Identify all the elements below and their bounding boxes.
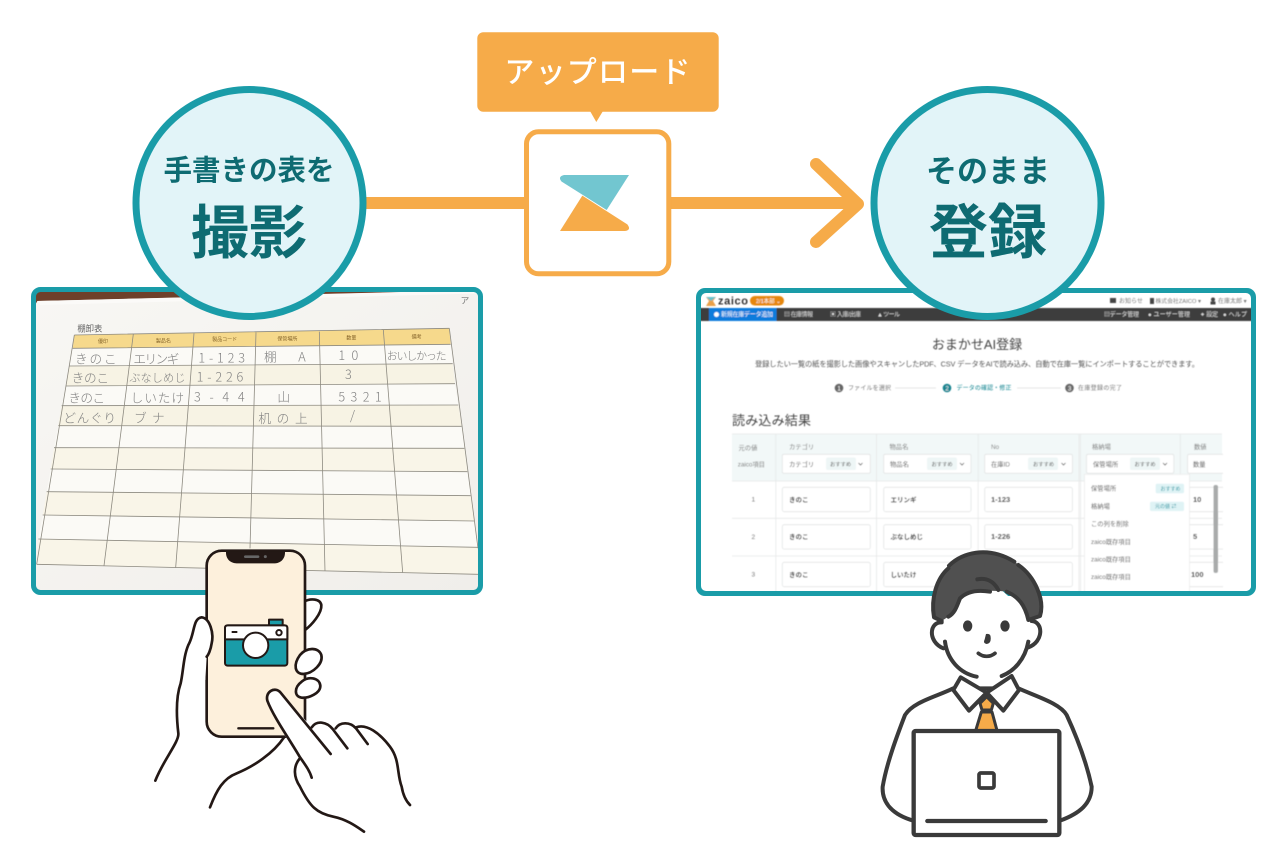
data rows: 100 xyxy=(1191,570,1204,579)
scrollbar xyxy=(1214,485,1218,573)
column mapping selects: おすすめ xyxy=(1134,461,1156,468)
data rows: 1-123 xyxy=(991,495,1010,504)
callout: upload: アップロード xyxy=(504,48,692,92)
page description: 登録したい一覧の紙を撮影した画像やスキャンしたPDF、CSV データをAIで読み込み、自動で在庫一覧にインポートすることができます。 xyxy=(755,360,1199,368)
dropdown menu xyxy=(1084,474,1190,599)
face xyxy=(931,577,1041,677)
step indicator: ファイルを選択 xyxy=(848,384,891,392)
handwritten entries: きのこ xyxy=(75,348,117,367)
column mapping selects: おすすめ xyxy=(1033,461,1054,468)
illustration: person working on a laptop xyxy=(883,552,1092,835)
icon: camera xyxy=(225,620,287,666)
dropdown menu: zaico既存項目 xyxy=(1091,572,1131,581)
data rows: きのこ xyxy=(789,496,808,504)
left circle keyword: 撮影 xyxy=(191,186,307,270)
data rows: きのこ xyxy=(789,571,808,579)
data rows xyxy=(751,454,1251,591)
handwritten entries: 棚 A xyxy=(264,347,306,366)
top-right account links: 株式会社ZAICO ▾ xyxy=(1156,297,1201,305)
data rows: エリンギ xyxy=(890,496,917,504)
data rows: しいたけ xyxy=(890,571,916,579)
column mapping selects xyxy=(782,454,1228,473)
dropdown menu: おすすめ xyxy=(1160,485,1181,492)
top-right account links: 在庫太郎 ▾ xyxy=(1218,297,1247,305)
table header band xyxy=(73,328,451,348)
callout: upload xyxy=(477,32,719,122)
header labels: 物品名 xyxy=(890,442,908,451)
top-right account links: お知らせ xyxy=(1119,297,1143,305)
handwritten entries: しいたけ xyxy=(131,387,184,406)
top-right account links xyxy=(1110,297,1247,305)
navigation bar: ● ヘルプ xyxy=(1223,312,1247,319)
smartphone xyxy=(207,551,305,737)
hair xyxy=(932,552,1041,621)
left hand thumb and palm xyxy=(155,617,212,781)
column mapping selects: 物品名 xyxy=(890,459,909,468)
data rows: 1 xyxy=(751,496,755,504)
handwritten entries: / xyxy=(350,405,355,424)
data rows: 5 xyxy=(1193,532,1197,541)
right circle keyword: 登録 xyxy=(929,185,1047,270)
zaico logo: zaico xyxy=(718,296,749,308)
navigation bar: ● ユーザー管理 xyxy=(1148,311,1190,319)
shirt collar xyxy=(953,676,1019,711)
handwritten entries: ぶなしめじ xyxy=(129,370,185,386)
right circle caption: そのまま xyxy=(926,146,1050,191)
handwritten entries: 3-44 xyxy=(194,387,245,406)
panel: handwritten table photo: 棚卸表 xyxy=(77,323,103,333)
handwritten entries: ア xyxy=(461,296,470,306)
handwritten entries: エリンギ xyxy=(133,348,179,367)
navigation bar: 新規在庫データ追加 xyxy=(721,311,773,319)
column mapping selects: カテゴリ xyxy=(789,459,814,468)
data rows: 2 xyxy=(751,534,755,541)
data rows: 1-226 xyxy=(991,532,1010,541)
column mapping selects: 在庫ID xyxy=(991,459,1010,468)
step indicator: 2 xyxy=(945,385,949,392)
front fingers xyxy=(296,649,322,698)
dropdown menu: 格納場 xyxy=(1091,502,1111,510)
column mapping selects: おすすめ xyxy=(830,461,851,468)
handwritten entries: きのこ xyxy=(68,387,105,406)
handwritten entries: おいしかった xyxy=(387,348,447,364)
panel: handwritten table photo: 備考 xyxy=(412,333,422,340)
data rows: 3 xyxy=(751,572,755,578)
results table xyxy=(732,434,1254,599)
header labels: 元の値 xyxy=(738,443,758,452)
section heading: 読み込み結果 xyxy=(732,413,811,428)
handwritten entries: 1-123 xyxy=(198,348,245,367)
header labels: 数値 xyxy=(1194,442,1207,451)
handwritten entries: 机の上 xyxy=(258,408,308,427)
panel: handwritten table photo: 優印 xyxy=(98,338,108,345)
handwritten entries: 5321 xyxy=(338,387,382,406)
data rows: きのこ xyxy=(789,533,808,541)
eyes, nose and mouth xyxy=(963,620,1010,656)
navigation bar: ✦ 設定 xyxy=(1200,311,1218,319)
navigation bar: ▲ ツール xyxy=(877,313,900,319)
wrist line xyxy=(210,737,284,807)
handwritten entries: 山 xyxy=(277,387,290,406)
dropdown menu: この列を削除 xyxy=(1091,519,1129,528)
necktie xyxy=(975,697,997,732)
body xyxy=(883,688,1092,821)
panel: handwritten table photo: 製品コード xyxy=(212,336,237,343)
header labels: No xyxy=(991,444,1000,451)
navigation bar xyxy=(698,308,1254,321)
connector line: left circle to logo box xyxy=(360,197,530,209)
step indicator: 1 xyxy=(837,385,841,392)
dropdown menu: 保管場所 xyxy=(1091,484,1117,492)
right hand xyxy=(267,689,410,832)
step indicator: 3 xyxy=(1068,385,1072,392)
dropdown menu: 元の値 ⇄ xyxy=(1155,503,1176,510)
page title: おまかせAI登録 xyxy=(932,337,1022,352)
back finger xyxy=(304,599,321,630)
navigation bar: ▤データ管理 xyxy=(1104,311,1139,319)
header labels: zaico項目 xyxy=(738,460,765,468)
navigation bar: ▤ 在庫情報 xyxy=(784,311,813,319)
column mapping selects: 数量 xyxy=(1193,459,1206,468)
step indicator: データの確認・修正 xyxy=(956,384,1012,392)
panel: handwritten table photo: 数量 xyxy=(346,334,356,341)
branch pill: 2/1本部 ⌄ xyxy=(756,297,781,305)
handwritten entries: きのこ xyxy=(72,367,109,386)
handwritten entries xyxy=(63,296,470,427)
column mapping selects: 保管場所 xyxy=(1093,459,1119,468)
handwritten entries: 10 xyxy=(338,345,359,364)
data rows: 10 xyxy=(1193,495,1201,504)
handwritten entries: どんぐり xyxy=(63,407,116,426)
zaico logo box xyxy=(526,132,669,274)
panel: handwritten table photo xyxy=(30,285,490,600)
handwritten entries: 1-226 xyxy=(197,367,244,386)
handwritten entries: ブナ xyxy=(134,407,165,426)
data rows: ぶなしめじ xyxy=(890,532,923,541)
arrow: logo box to right circle xyxy=(665,164,858,242)
dropdown menu: zaico既存項目 xyxy=(1091,554,1131,564)
step indicator: 在庫登録の完了 xyxy=(1078,384,1122,392)
right circle: register as-is xyxy=(874,90,1101,316)
header labels xyxy=(738,442,1207,468)
left circle: photograph the handwritten table xyxy=(136,90,363,316)
left circle caption: 手書きの表を xyxy=(163,148,335,189)
dropdown menu: zaico既存項目 xyxy=(1091,537,1131,546)
handwritten entries: 3 xyxy=(345,364,352,383)
illustration: hands holding a smartphone xyxy=(155,551,410,832)
branch pill xyxy=(750,296,784,306)
panel: handwritten table photo: 保管場所 xyxy=(277,335,297,342)
header labels: カテゴリ xyxy=(789,442,814,451)
column mapping selects: おすすめ xyxy=(932,461,953,468)
laptop xyxy=(914,731,1059,835)
step indicator xyxy=(835,384,1122,392)
panel: handwritten table photo: 製品名 xyxy=(156,337,171,344)
header labels: 格納場 xyxy=(1092,442,1112,451)
navigation bar: ▣ 入庫/出庫 xyxy=(830,311,861,319)
